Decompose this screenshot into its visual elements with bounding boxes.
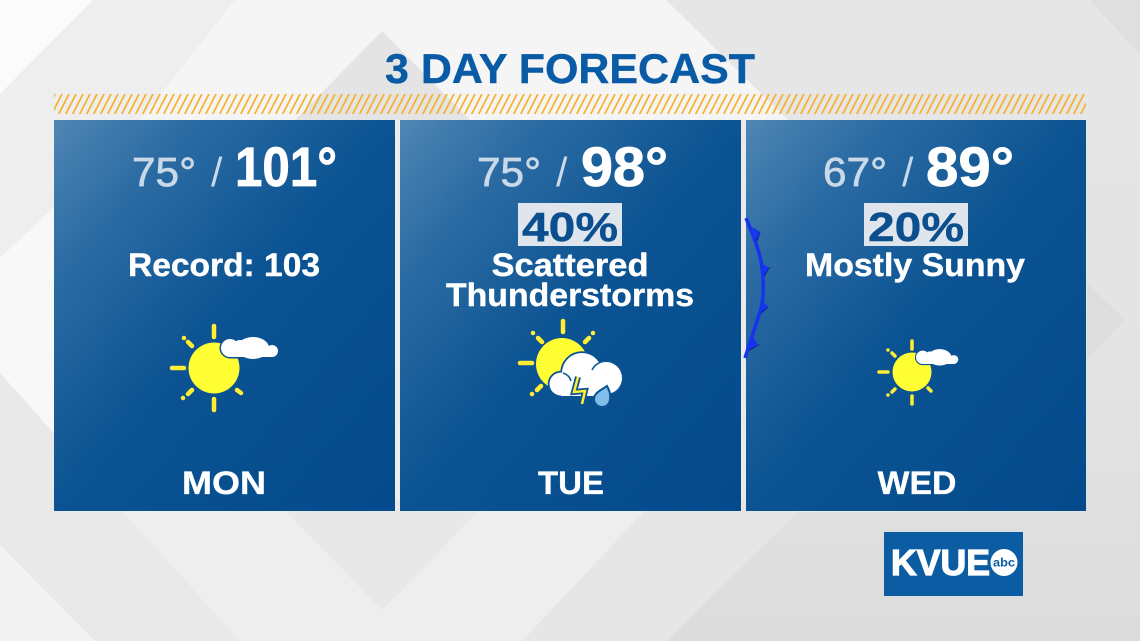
logo: KVUE abc: abc xyxy=(993,558,1016,570)
condition text: Thunderstorms xyxy=(446,277,694,313)
low temperature: 75° xyxy=(132,149,196,195)
separator: / xyxy=(902,149,914,195)
low temperature: 75° xyxy=(477,149,541,195)
panel: Wednesday xyxy=(746,120,1086,511)
condition text: Mostly Sunny xyxy=(805,247,1025,283)
record text: Record: 103 xyxy=(128,247,320,283)
separator: / xyxy=(556,149,568,195)
icon: sun with storm cloud xyxy=(520,321,622,407)
panel: Tuesday xyxy=(400,120,741,511)
title: 3 DAY FORECAST xyxy=(385,45,755,92)
icon: sun with small cloud xyxy=(879,341,958,404)
day label: MON xyxy=(182,465,266,501)
high temperature: 89° xyxy=(926,135,1014,198)
precipitation chance: 20% xyxy=(868,204,964,250)
high temperature: 101° xyxy=(235,135,337,198)
condition text xyxy=(446,247,694,313)
hatched orange divider xyxy=(54,94,1086,114)
cold front symbol xyxy=(745,218,769,358)
day label: TUE xyxy=(538,465,604,501)
panel: Monday xyxy=(54,120,395,511)
logo: KVUE abc: KVUE xyxy=(891,542,990,583)
logo: KVUE abc xyxy=(884,532,1023,596)
day label: WED xyxy=(878,465,956,501)
low temperature: 67° xyxy=(823,149,887,195)
separator: / xyxy=(211,149,223,195)
condition text: Scattered xyxy=(492,247,648,283)
precipitation chance: 40% xyxy=(522,204,618,250)
high temperature: 98° xyxy=(581,135,668,198)
icon: sun with small cloud xyxy=(172,326,278,410)
